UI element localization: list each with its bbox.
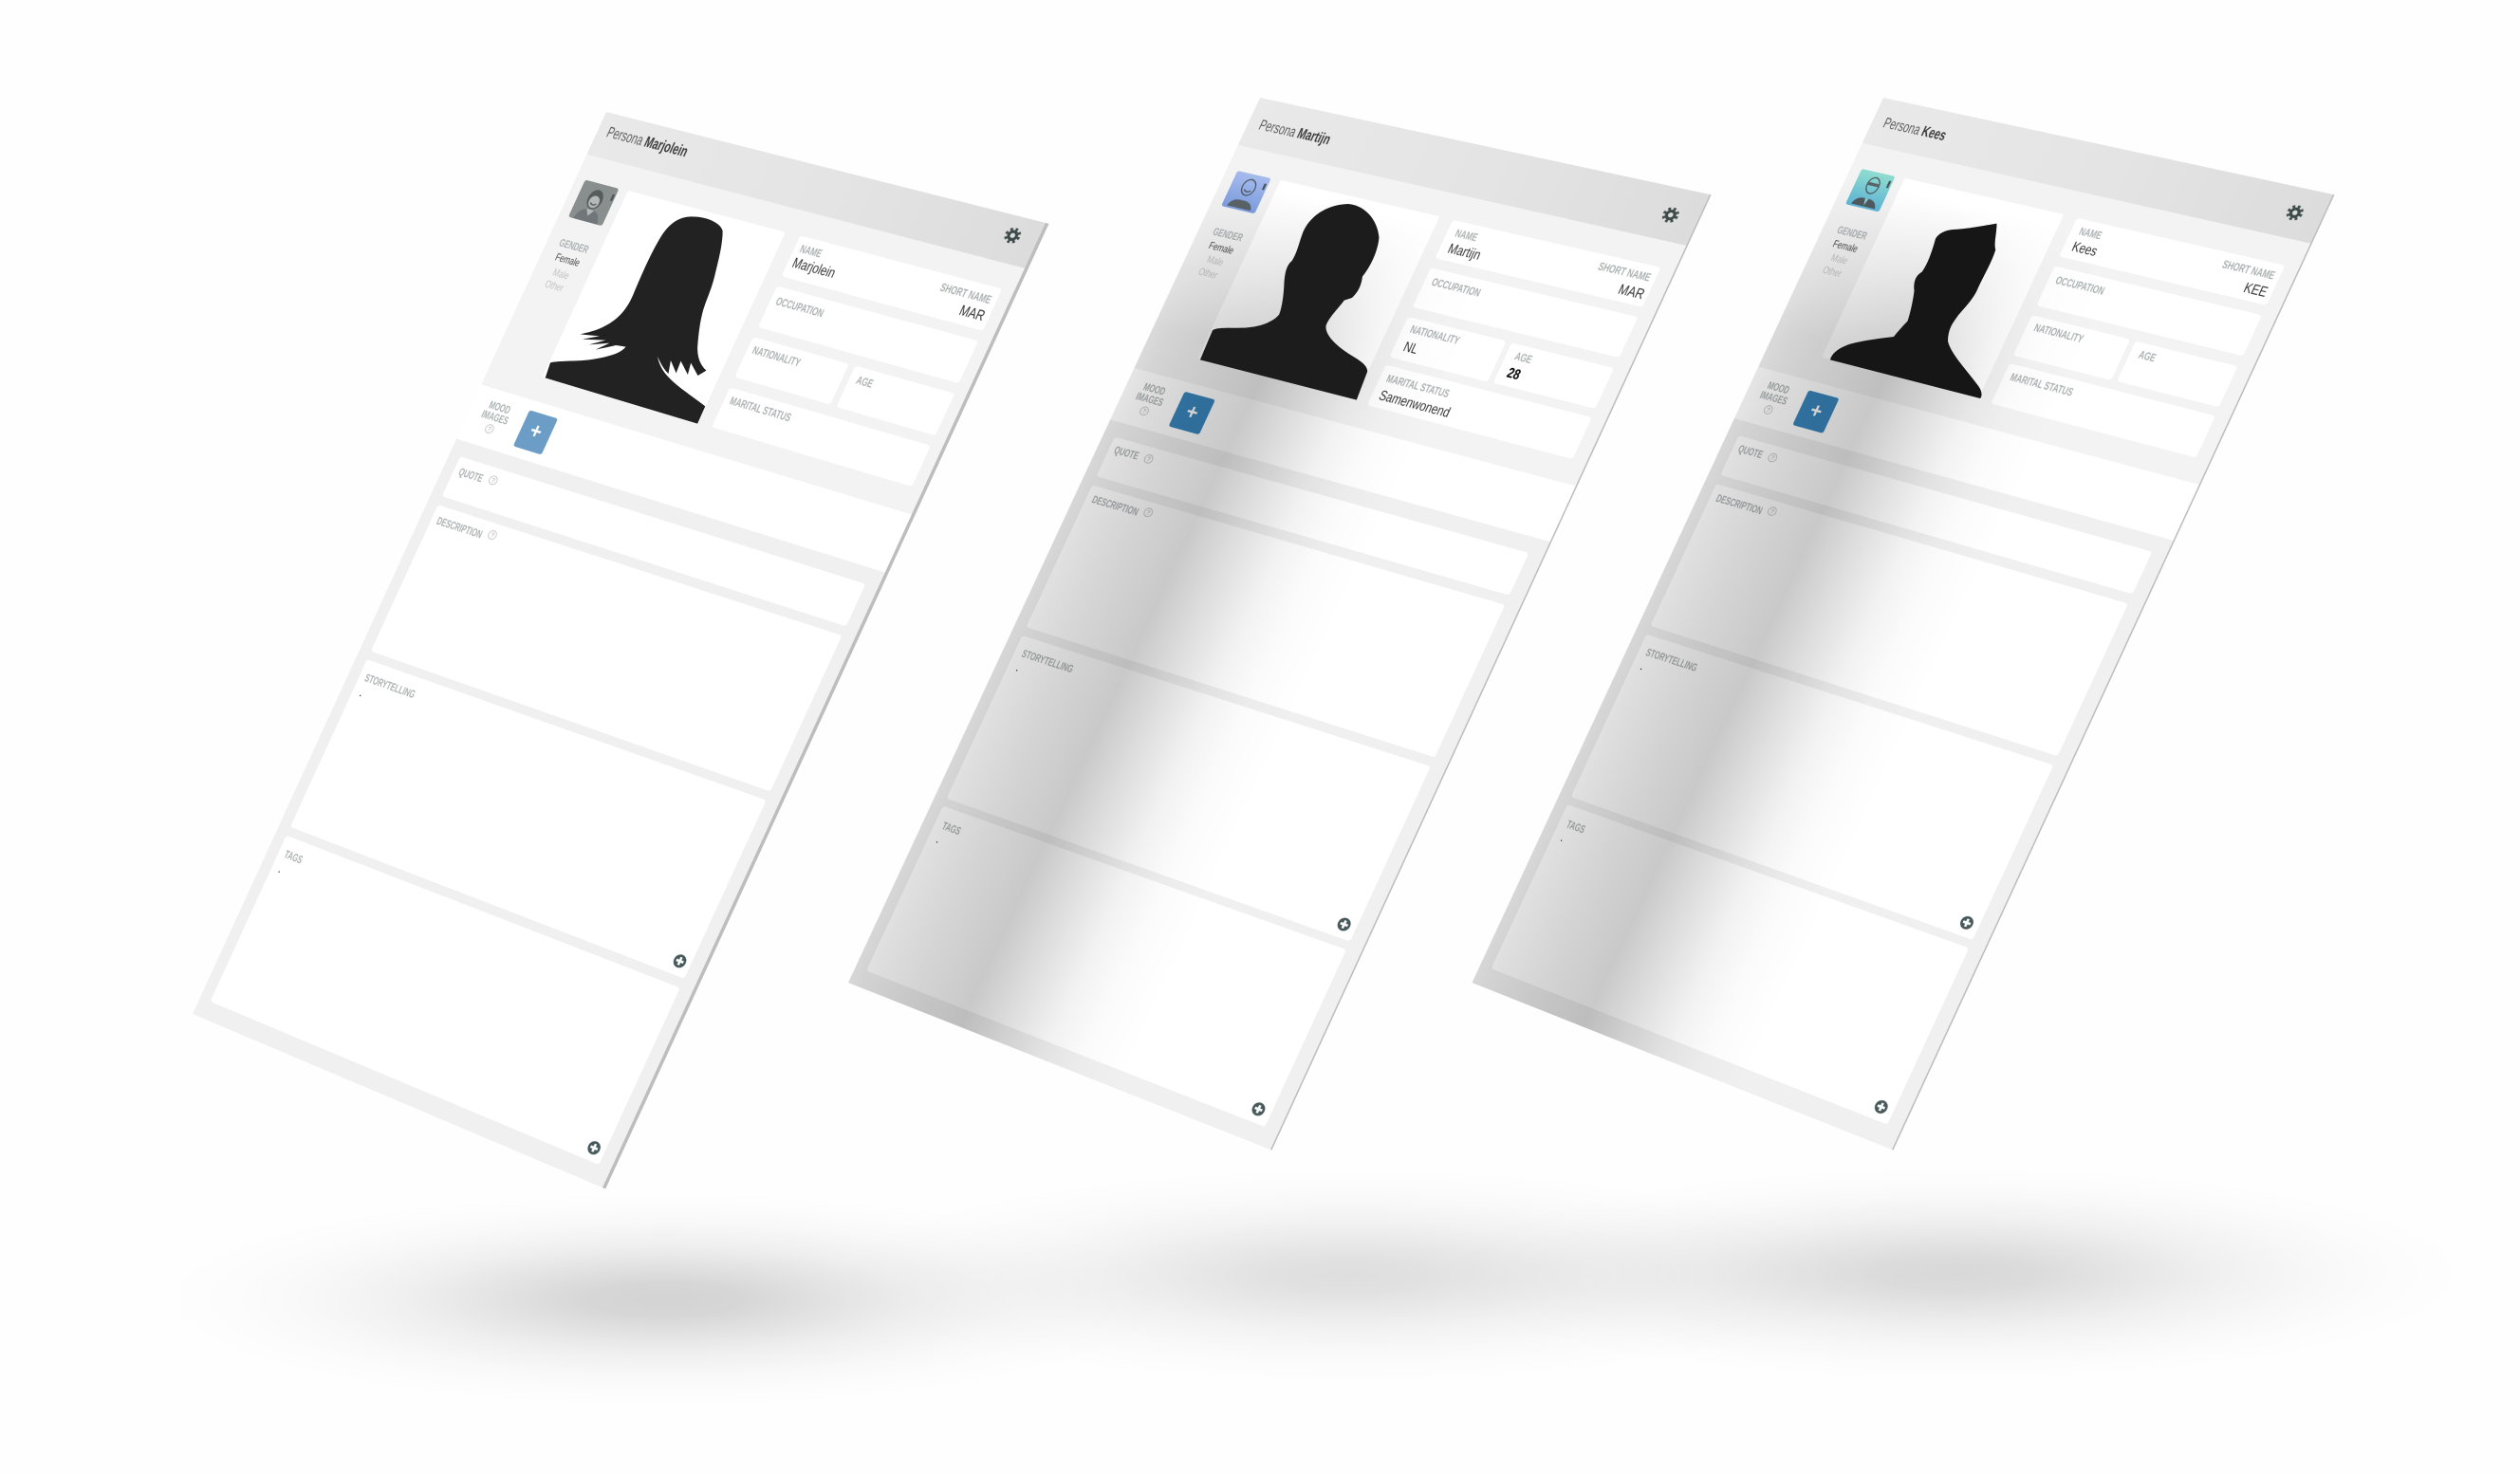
field: name and short name: SHORT NAME [2220, 258, 2277, 282]
field: occupation: OCCUPATION [2053, 274, 2107, 297]
card side edge [1270, 194, 1712, 1151]
mood images label [480, 398, 512, 434]
box: description: ? [489, 531, 496, 539]
card side edge [602, 223, 1048, 1188]
silhouette: Kees [1830, 224, 1996, 398]
field: name and short name [782, 235, 1002, 331]
gender selector [543, 236, 591, 294]
add mood image button: + [1806, 398, 1826, 423]
add mood image button [513, 410, 558, 454]
field: nationality: NATIONALITY [1408, 322, 1462, 346]
field: occupation [2036, 266, 2262, 356]
floor shadow: left [153, 1190, 1177, 1409]
box: quote: ? [490, 476, 496, 485]
field: name and short name [2059, 218, 2285, 305]
box: tags [211, 836, 680, 1165]
field: marital status: MARITAL STATUS [1384, 372, 1452, 400]
card: persona Kees [1472, 98, 2333, 1150]
box: storytelling: . [1639, 664, 1644, 672]
field: occupation: OCCUPATION [774, 295, 826, 320]
box: tags [866, 806, 1346, 1127]
add mood image button: + [526, 418, 547, 444]
field: occupation [758, 286, 978, 383]
box: storytelling [1571, 635, 2053, 940]
add mood image button [1169, 392, 1215, 434]
mood images label: ? [1765, 406, 1771, 414]
box: quote [1720, 435, 2152, 594]
field: occupation [1413, 267, 1638, 358]
box: tags: . [1560, 835, 1565, 843]
upper panel [481, 155, 1025, 514]
add mood image button: + [1181, 400, 1203, 425]
floor shadow: right [1433, 1165, 2476, 1383]
field: nationality [734, 337, 849, 405]
header title: Persona Marjolein [604, 123, 691, 160]
silhouette: Martijn [1200, 204, 1379, 400]
field: name and short name: Marjolein [789, 255, 838, 281]
header bar [1238, 98, 1710, 246]
card: persona Martijn [848, 98, 1710, 1150]
mood images label: MOOD [487, 398, 512, 416]
upper panel [1758, 143, 2310, 485]
field: age: 28 [1505, 365, 1523, 383]
upper panel [1134, 145, 1686, 486]
icon: settings gear [2287, 205, 2304, 220]
mood images label [1758, 379, 1791, 415]
mood images label: IMAGES [480, 407, 510, 427]
box: description: ? [1769, 507, 1775, 515]
field: nationality: NL [1401, 340, 1421, 358]
reflection shading [1473, 220, 2009, 1066]
silhouette: Marjolein [546, 216, 723, 424]
mood images label: IMAGES [1134, 390, 1165, 409]
box: quote [442, 456, 865, 626]
icon: add [1960, 916, 1973, 930]
box: tags: . [935, 837, 940, 845]
field: marital status: MARITAL STATUS [2009, 371, 2076, 398]
gender selector: Male [1829, 251, 1850, 267]
field: name and short name: SHORT NAME [938, 281, 993, 306]
box: tags: TAGS [940, 820, 963, 838]
field: nationality [1389, 317, 1507, 382]
icon: add [1337, 917, 1351, 931]
card: persona Marjolein [193, 112, 1046, 1188]
icon: add [587, 1140, 602, 1155]
header title: Persona Martijn [1256, 117, 1334, 148]
icon: add [1251, 1102, 1266, 1116]
mood images label: IMAGES [1758, 389, 1789, 407]
box: description [1027, 485, 1505, 757]
icon: settings gear [1004, 228, 1021, 244]
field: marital status [1991, 363, 2215, 458]
box: tags [1492, 804, 1969, 1125]
field: age: AGE [1512, 350, 1534, 366]
gender selector [1196, 225, 1245, 281]
field: age: AGE [854, 374, 876, 390]
field: name and short name: MAR [1616, 282, 1647, 303]
avatar thumbnail [569, 180, 619, 226]
gender selector: Female [553, 250, 582, 268]
mood images label: MOOD [1766, 379, 1791, 396]
box: description [371, 505, 842, 791]
box: description: ? [1145, 508, 1152, 517]
add mood image button [1792, 390, 1839, 433]
gender selector [1821, 224, 1869, 279]
field: name and short name: NAME [798, 242, 825, 260]
box: description: DESCRIPTION [1714, 492, 1765, 517]
icon: add [674, 954, 687, 967]
icon: settings gear [1662, 207, 1679, 223]
field: marital status [712, 387, 931, 487]
gender selector: GENDER [557, 236, 591, 256]
lower panel [1472, 418, 2174, 1150]
card side edge [1892, 194, 2335, 1151]
gender selector: GENDER [1835, 224, 1869, 242]
field: marital status: Samenwonend [1377, 388, 1453, 420]
gender selector: Male [551, 266, 571, 282]
field: marital status [1367, 365, 1592, 459]
field: age [1493, 342, 1614, 409]
box: storytelling: . [359, 690, 363, 698]
box: tags: TAGS [283, 848, 305, 866]
lower panel [193, 439, 885, 1188]
field: name and short name: MAR [956, 303, 988, 324]
avatar thumbnail [1846, 169, 1895, 212]
gender selector: Female [1207, 239, 1236, 256]
box: storytelling: STORYTELLING [1644, 646, 1699, 673]
field: age [2117, 341, 2237, 407]
box: storytelling: STORYTELLING [1020, 647, 1076, 675]
gender selector: Female [1831, 238, 1860, 254]
field: age [836, 365, 954, 435]
field: name and short name: SHORT NAME [1596, 260, 1653, 284]
mood images label: ? [486, 425, 492, 433]
field: nationality: NATIONALITY [750, 343, 803, 369]
field: occupation: OCCUPATION [1430, 275, 1483, 299]
mood images label [1134, 380, 1168, 415]
field: name and short name: NAME [2077, 225, 2104, 242]
gender selector: GENDER [1211, 225, 1245, 244]
header bar [586, 112, 1046, 268]
icon: add [1875, 1100, 1888, 1114]
field: name and short name: Kees [2069, 239, 2100, 259]
mood images label: MOOD [1141, 380, 1168, 397]
floor shadow: middle [826, 1167, 1870, 1385]
field: name and short name [1436, 220, 1660, 307]
gender selector: Other [1821, 264, 1844, 279]
box: storytelling [947, 636, 1431, 942]
box: quote [1097, 437, 1529, 596]
gender selector: Other [1196, 266, 1220, 281]
portrait photo area [543, 191, 786, 423]
field: name and short name: NAME [1454, 227, 1480, 244]
box: storytelling: STORYTELLING [362, 672, 417, 701]
box: quote: QUOTE [1112, 444, 1141, 462]
box: quote: QUOTE [456, 466, 485, 485]
box: quote: ? [1770, 453, 1776, 462]
box: quote: ? [1145, 455, 1152, 463]
box: storytelling [290, 659, 767, 979]
portrait photo area [1822, 178, 2064, 398]
field: age: AGE [2137, 348, 2159, 364]
field: nationality [2013, 315, 2130, 380]
field: marital status: MARITAL STATUS [728, 395, 793, 424]
portrait photo area [1197, 180, 1439, 399]
box: quote: QUOTE [1736, 442, 1765, 461]
avatar thumbnail [1222, 171, 1270, 213]
field: nationality: NATIONALITY [2032, 322, 2085, 345]
header bar [1862, 98, 2333, 244]
field: name and short name: Martijn [1445, 241, 1484, 263]
box: description: DESCRIPTION [435, 514, 485, 541]
lower panel [848, 419, 1550, 1150]
reflection shading [848, 219, 1385, 1066]
box: tags: TAGS [1565, 818, 1587, 836]
field: name and short name: KEE [2241, 280, 2270, 301]
box: storytelling: . [1015, 665, 1020, 673]
gender selector: Male [1205, 253, 1226, 268]
box: description: DESCRIPTION [1090, 493, 1140, 518]
gender selector: Other [543, 278, 565, 294]
box: description [1650, 484, 2128, 756]
mood images label: ? [1140, 407, 1148, 415]
box: tags: . [277, 866, 283, 875]
header title: Persona Kees [1881, 114, 1950, 143]
